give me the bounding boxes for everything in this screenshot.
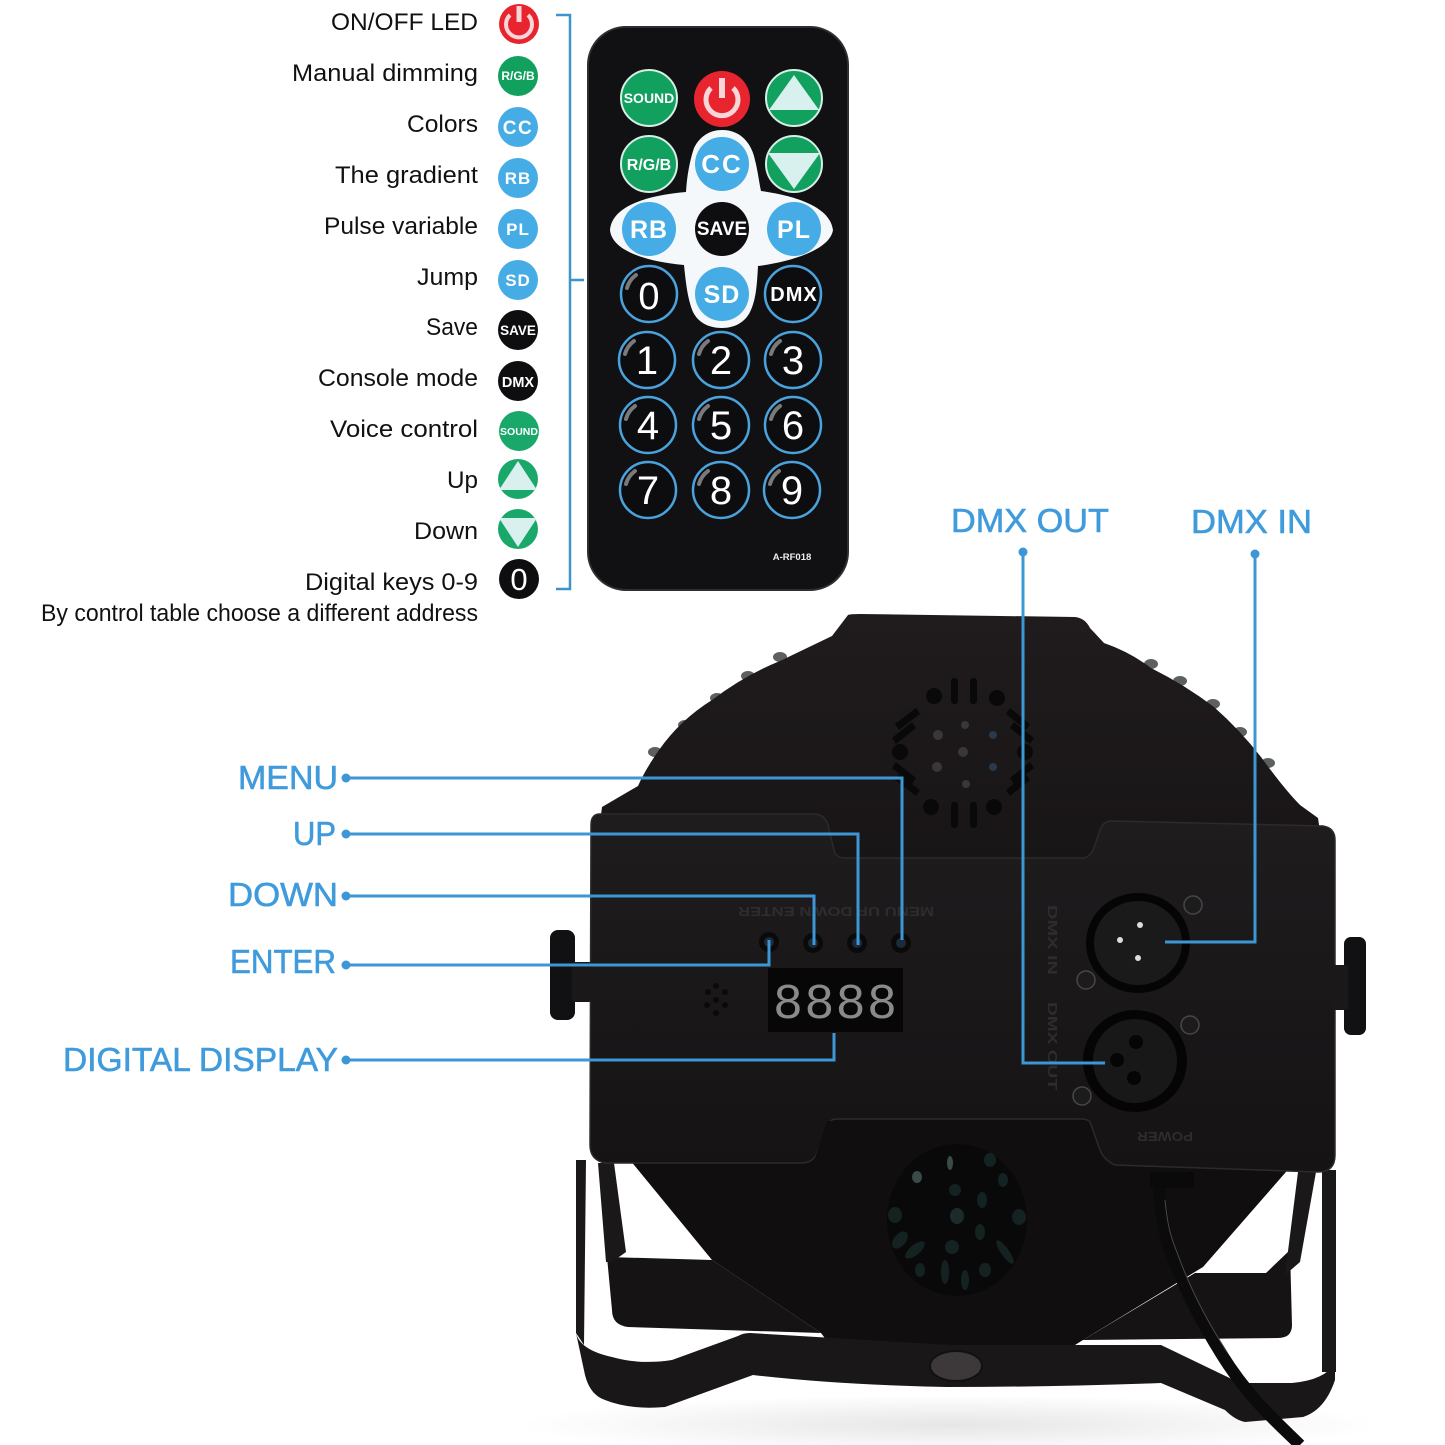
button: 0: 0: [638, 276, 660, 318]
icon: up arrow: [498, 459, 538, 499]
button: 4: 4: [637, 404, 659, 448]
cable socket: [1150, 1172, 1194, 1188]
icon: SOUND: SOUND: [500, 426, 538, 438]
icon: R/G/B: [498, 56, 538, 96]
button: sd: SD: [704, 281, 740, 309]
printed panel labels: DMX OUT: [1045, 1002, 1060, 1090]
label: dmx out: DMX OUT: [951, 502, 1109, 539]
label: on/off: ON/OFF LED: [331, 9, 478, 36]
bracket linking legend to remote: [556, 15, 584, 589]
printed panel labels: DMX IN: [1045, 905, 1060, 975]
leader: dmx out: [1023, 552, 1105, 1063]
yoke foot: [576, 1333, 1335, 1422]
label: save: Save: [426, 314, 478, 341]
button: r/g/b: [621, 136, 677, 192]
label: gradient: The gradient: [335, 162, 478, 189]
button: pl: [767, 202, 821, 256]
white cross pad: [610, 130, 833, 328]
button: 6: 6: [782, 404, 804, 448]
printed panel labels: [737, 904, 1193, 1144]
icon: CC: [498, 107, 538, 147]
printed panel labels: POWER: [1136, 1129, 1193, 1144]
icon: RB: [498, 158, 538, 198]
label: console mode: Console mode: [318, 365, 478, 392]
leader: digital display: [345, 1033, 834, 1060]
button: r/g/b: R/G/B: [627, 157, 671, 174]
icon: PL: [498, 209, 538, 249]
icon: SAVE: [498, 310, 538, 350]
callout lines: [345, 552, 1255, 1063]
knob right: [1332, 937, 1366, 1035]
button: dmx: [765, 266, 821, 322]
leader: up: [345, 834, 858, 945]
label: digital keys: Digital keys 0-9: [305, 569, 478, 596]
lower speaker vent: [887, 1144, 1027, 1296]
lower disc: [630, 1110, 1292, 1345]
button: 3: 3: [782, 339, 804, 383]
button: 2: 2: [710, 339, 732, 383]
icon: PL: PL: [506, 220, 530, 239]
list of remote button labels: [41, 9, 478, 627]
yoke legs: [576, 1160, 1336, 1372]
button: up: [766, 70, 822, 126]
upper dome housing: [590, 614, 1330, 900]
button: pl: PL: [777, 216, 811, 244]
icon: SD: [498, 260, 538, 300]
icon: zero key: 0: [510, 562, 528, 597]
icon: zero key: [499, 559, 539, 599]
label: manual dimming: Manual dimming: [292, 60, 478, 87]
icon: SOUND: [499, 411, 539, 451]
button: sd: [695, 267, 749, 321]
label: address note: By control table choose a different address: [41, 600, 478, 627]
icon: RB: RB: [505, 169, 531, 188]
legend button icons: [498, 4, 539, 599]
icon: DMX: DMX: [502, 375, 534, 391]
button: 7: [620, 462, 676, 518]
button: 7: 7: [637, 469, 659, 513]
label: enter: ENTER: [230, 943, 336, 980]
button: cc: [695, 137, 749, 191]
button: cc: CC: [701, 149, 743, 179]
button: 0: [621, 266, 677, 322]
printed panel labels: MENU UP DOWN ENTER: [737, 904, 934, 919]
button: save: [695, 202, 749, 256]
button: 8: [693, 462, 749, 518]
model number: A-RF018: [773, 552, 811, 563]
button: rb: RB: [630, 216, 668, 244]
remote control: [588, 27, 848, 590]
button: 5: [693, 397, 749, 453]
button: 4: [620, 397, 676, 453]
label: down: Down: [414, 518, 478, 545]
foot screw: [930, 1351, 982, 1381]
label: down: DOWN: [228, 876, 338, 913]
callout dots: [342, 548, 1260, 1064]
leader: enter: [345, 940, 769, 965]
label: jump: Jump: [417, 264, 478, 291]
label: up: UP: [293, 815, 336, 852]
button: rb: [622, 202, 676, 256]
leader: menu: [345, 778, 902, 940]
button: dmx: DMX: [770, 284, 818, 306]
leader: down: [345, 896, 814, 945]
digital display: 8888: [773, 977, 897, 1034]
light fixture rear: [550, 614, 1366, 1445]
rear yoke plate: [607, 1250, 1292, 1340]
label: colors: Colors: [407, 111, 478, 138]
label: voice control: Voice control: [330, 416, 478, 443]
dmx out connector: [1073, 1010, 1199, 1112]
button: 8: 8: [710, 469, 732, 513]
label: menu: MENU: [238, 759, 338, 796]
button: 6: [765, 397, 821, 453]
button: 1: [619, 332, 675, 388]
leader: dmx in: [1165, 554, 1255, 942]
button: sound: [621, 70, 677, 126]
main rear body: [590, 814, 1335, 1172]
button: 3: [765, 332, 821, 388]
button: 9: 9: [781, 469, 803, 513]
button: power: [694, 71, 750, 127]
upper speaker vent: [892, 678, 1034, 828]
icon: DMX: [498, 361, 538, 401]
button: 5: 5: [710, 404, 732, 448]
icon: power: [499, 4, 539, 44]
small mic holes: [704, 983, 728, 1016]
button: 1: 1: [636, 339, 658, 383]
menu buttons: [759, 932, 911, 953]
button: sound: SOUND: [624, 90, 674, 106]
icon: SAVE: SAVE: [500, 323, 536, 338]
led nubs: [648, 652, 1275, 768]
label: dmx in: DMX IN: [1191, 503, 1312, 540]
lower recess: [811, 1121, 1104, 1170]
icon: down arrow: [498, 509, 538, 549]
icon: CC: CC: [503, 118, 533, 139]
power cable: [1159, 1187, 1300, 1445]
button: down: [766, 136, 822, 192]
callout labels: [63, 502, 1312, 1078]
icon: SD: SD: [505, 271, 531, 290]
knob left: [550, 930, 592, 1020]
label: up: Up: [447, 467, 478, 494]
remote body: [588, 27, 848, 590]
button: 9: [764, 462, 820, 518]
dmx in connector: [1077, 893, 1202, 993]
label: digital display: DIGITAL DISPLAY: [63, 1041, 338, 1078]
label: pulse variable: Pulse variable: [324, 213, 478, 240]
icon: R/G/B: R/G/B: [501, 69, 535, 83]
button: save: SAVE: [697, 219, 747, 240]
button: 2: [693, 332, 749, 388]
